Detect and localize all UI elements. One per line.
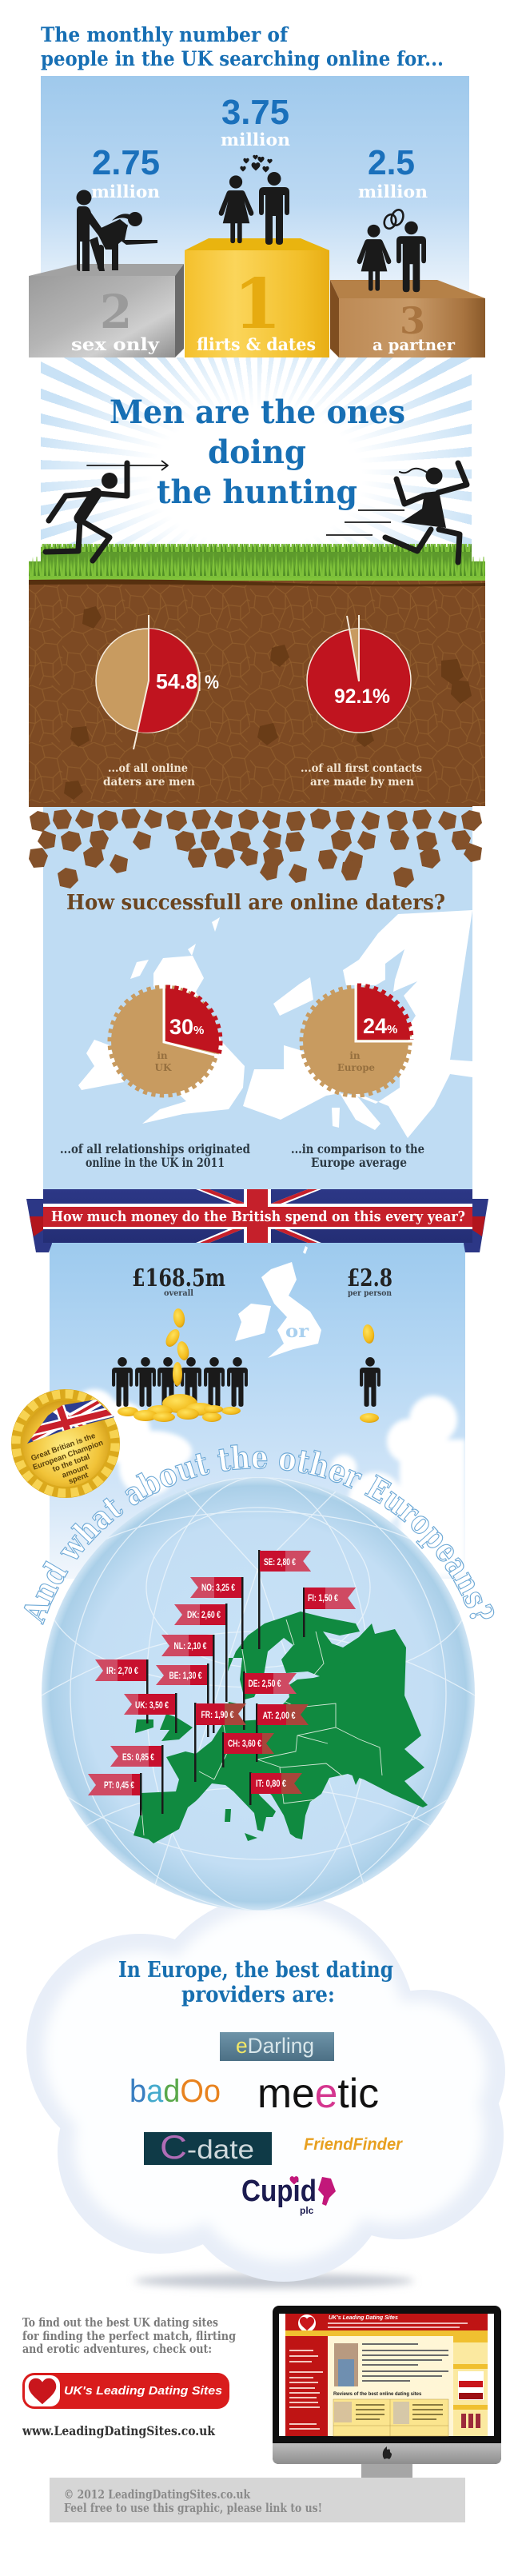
medal: Great Britain is the champion: amount — [61, 1462, 90, 1480]
statistic: 2.5 million: 2.5 — [368, 143, 415, 182]
text: find the best UK dating sites — [22, 2315, 236, 2356]
link: website address: www.LeadingDatingSites.co.uk — [22, 2423, 216, 2438]
panel: British spending background — [50, 1243, 465, 1579]
seal chart: 24% in Europe: in — [349, 1050, 361, 1061]
logo: meetic: meetic — [257, 2071, 379, 2117]
flag: NO — [190, 1577, 243, 1649]
seal chart: 24% in Europe: Europe — [337, 1062, 375, 1073]
medal: Great Britain is the champion: Great Britian is the — [30, 1432, 97, 1463]
map: white UK and Europe — [78, 910, 472, 1138]
heading: men are the ones doing the hunting — [110, 393, 405, 511]
icon: single coin falling — [360, 1324, 379, 1423]
icon: flirting couple with hearts — [219, 155, 289, 245]
flag: NL — [161, 1635, 214, 1733]
pie chart: 54.8% online daters are men: 54.8 — [156, 669, 197, 693]
panel: online daters success background — [43, 806, 472, 1190]
flag: ES: ES: 0,85 € — [122, 1751, 154, 1763]
flag: DK: DK: 2,60 € — [187, 1609, 221, 1620]
button: UK's Leading Dating Sites: UK's Leading Dating Sites — [64, 2384, 222, 2398]
flag: FI — [303, 1588, 356, 1637]
statistic: 2.5 million: million — [358, 182, 428, 202]
podium: second place silver — [29, 264, 184, 357]
podium: first place gold: flirts & dates — [197, 334, 316, 354]
title: people in the UK searching online for... — [41, 47, 444, 70]
crumbling soil pieces — [29, 803, 482, 889]
ribbon tails — [26, 1199, 488, 1252]
logo: eDarling: eDarling — [236, 2034, 314, 2058]
logo: FriendFinder: FriendFinder — [304, 2135, 404, 2154]
monitor with website screenshot — [273, 2306, 501, 2478]
panel: sunburst background — [41, 357, 472, 549]
statistic: 2.75 million: million — [91, 182, 160, 202]
flag: NO: NO: 3,25 € — [201, 1582, 235, 1593]
seal chart: 24% in Europe — [303, 984, 413, 1094]
seal chart: 30% in UK — [111, 984, 219, 1094]
flag: DK — [174, 1604, 227, 1702]
podium: third place bronze — [330, 280, 485, 357]
statistic: 3.75 million: 3.75 — [221, 93, 289, 132]
flag: FR: FR: 1,90 € — [201, 1709, 234, 1720]
clouds behind spending section — [56, 1389, 465, 1576]
flag: SE — [258, 1550, 311, 1649]
statistic: 3.75 million: million — [221, 130, 290, 150]
flag: NL: NL: 2,10 € — [174, 1640, 207, 1651]
podium: third place bronze: a partner — [373, 335, 455, 354]
flag: SE: SE: 2,80 € — [264, 1556, 296, 1568]
panel: monthly searches podium — [29, 76, 485, 357]
statistic: 168.5m overall: £168.5m — [132, 1264, 225, 1292]
flag: IT — [249, 1772, 302, 1805]
heading: best dating providers: In Europe, the best dating — [118, 1958, 393, 1983]
caption: first contacts: are made by men — [310, 776, 414, 789]
statistic: 2.5 million — [358, 143, 428, 202]
logo: C-date — [144, 2128, 272, 2166]
heading: how successfull: How successfull are online daters? — [66, 891, 445, 915]
flag: CH: CH: 3,60 € — [228, 1738, 261, 1749]
medal: Great Britain is the champion: spent — [67, 1471, 90, 1486]
seal chart: 30% in UK: in — [157, 1050, 168, 1061]
flag: PT — [88, 1773, 142, 1815]
grass strip — [29, 544, 485, 581]
heading: men are the ones doing the hunting: doing — [208, 433, 306, 471]
caption: first contacts — [301, 762, 422, 789]
map: British Isles with or: or — [285, 1321, 309, 1342]
pie chart: 54.8% online daters are men: % — [205, 672, 219, 693]
logo: badoo: badOo — [129, 2074, 221, 2109]
podium: second place silver: sex only — [71, 334, 160, 354]
statistic: 168.5m overall: overall — [164, 1289, 193, 1298]
statistic: 2.75 million: 2.75 — [92, 143, 160, 182]
caption: relationships originated online: ...of all relationships originated — [60, 1141, 250, 1156]
podium: third place bronze: 3 — [400, 299, 425, 342]
text: find the best UK dating sites: for finding the perfect match, flirting — [22, 2329, 236, 2343]
globe — [42, 1477, 475, 1911]
caption: Europe average: Europe average — [311, 1155, 407, 1170]
caption: online daters: ...of all online — [108, 762, 188, 775]
icon: married couple with rings — [357, 208, 426, 292]
caption: Europe average — [291, 1141, 424, 1170]
flags with spending per country — [88, 1550, 356, 1815]
caption: first contacts: ...of all first contacts — [301, 762, 422, 775]
medal: Great Britain is the champion: European Champion — [32, 1439, 105, 1472]
logo: Cupid plc: Cupid — [241, 2175, 317, 2208]
monitor with website screenshot: Reviews of the best online dating sites — [333, 2392, 422, 2397]
panel: white cloud — [26, 1893, 505, 2282]
pie chart: 92.1% first contacts made by men: 92.1% — [334, 685, 390, 708]
heading: men are the ones doing the hunting: the hunting — [157, 473, 357, 511]
flag: PT: PT: 0,45 € — [104, 1779, 134, 1791]
medal: Great Britain is the champion: to the total — [51, 1452, 91, 1474]
podium: second place silver: 2 — [100, 285, 132, 339]
heading: curved around globe: And what about the other Europeans? — [24, 1444, 494, 1625]
banner: Union Jack heading: How much money do the British spend on this every year? — [51, 1208, 465, 1225]
flag: BE: BE: 1,30 € — [169, 1670, 202, 1681]
flag: DE: DE: 2,50 € — [248, 1678, 281, 1689]
seal chart: 30% in UK: 30% — [169, 1015, 204, 1039]
flag: IT: IT: 0,80 € — [256, 1778, 286, 1789]
title: The monthly number of — [41, 23, 289, 46]
statistic: 2.8 per person: £2.8 — [347, 1264, 392, 1292]
flag: FI: FI: 1,50 € — [308, 1592, 338, 1604]
logo: Cupid plc: plc — [300, 2205, 314, 2216]
flag: AT: AT: 2,00 € — [262, 1710, 296, 1721]
pie chart: 54.8% online daters are men — [96, 615, 219, 749]
caption: online daters — [103, 762, 195, 789]
title — [41, 23, 444, 70]
statistic: 2.8 per person: per person — [348, 1289, 392, 1298]
pie chart: 92.1% first contacts made by men — [307, 615, 411, 733]
flag: IR: IR: 2,70 € — [106, 1665, 138, 1676]
caption: relationships originated online: online in the UK in 2011 — [86, 1155, 225, 1170]
panel: underground soil — [29, 579, 485, 806]
caption: online daters: daters are men — [103, 776, 195, 789]
heading: men are the ones doing the hunting: Men are the ones — [110, 393, 405, 431]
flag: UK: UK: 3,50 € — [135, 1699, 169, 1711]
text: find the best UK dating sites: To find out the best UK dating sites — [22, 2315, 218, 2330]
icon: one person — [360, 1357, 381, 1407]
map: British Isles with or — [235, 1246, 321, 1358]
statistic: 2.75 million — [91, 143, 160, 202]
flag: BE — [156, 1663, 209, 1737]
caption: Europe average: ...in comparison to the — [291, 1141, 424, 1156]
icon: running woman — [326, 463, 467, 562]
podium: first place gold — [185, 238, 329, 357]
flag: CH — [222, 1732, 274, 1767]
heading: best dating providers: providers are: — [181, 1983, 335, 2007]
map: Europe in green — [133, 1611, 428, 1843]
podium: first place gold: 1 — [233, 264, 281, 345]
flag: ES — [110, 1745, 163, 1814]
statistic: 2.8 per person — [347, 1264, 392, 1298]
caption: relationships originated online — [60, 1141, 250, 1170]
medal: Great Britain is the champion — [11, 1389, 120, 1498]
footer: copyright bar: Feel free to use this graphic, please link to us! — [64, 2501, 322, 2515]
heading: best dating providers — [118, 1958, 393, 2007]
footer: copyright bar: © 2012 LeadingDatingSites.co.uk — [64, 2487, 250, 2502]
statistic: 3.75 million — [221, 93, 290, 150]
statistic: 168.5m overall — [132, 1264, 225, 1298]
flag: AT — [256, 1703, 309, 1762]
text: find the best UK dating sites: and erotic adventures, check out: — [22, 2342, 212, 2356]
logo: C-date: C-date — [160, 2128, 254, 2166]
banner: Union Jack heading — [43, 1189, 472, 1243]
seal chart: 24% in Europe: 24% — [363, 1014, 397, 1038]
icon: falling coins and pile — [118, 1308, 241, 1422]
seal chart: 30% in UK: UK — [155, 1062, 172, 1073]
icon: hunter with spear — [46, 461, 168, 561]
icon: couple having sex — [77, 190, 157, 271]
flag: DE — [243, 1671, 297, 1730]
flag: UK — [124, 1693, 177, 1733]
flag: FR — [194, 1703, 246, 1782]
flag: IR — [95, 1659, 149, 1723]
button: UK's Leading Dating Sites — [22, 2373, 229, 2409]
footer: copyright bar — [50, 2478, 465, 2522]
logo: eDarling — [220, 2032, 334, 2061]
monitor with website screenshot: UK's Leading Dating Sites — [329, 2315, 398, 2321]
icon: six people — [112, 1357, 248, 1407]
cloud shadow — [134, 2274, 414, 2288]
